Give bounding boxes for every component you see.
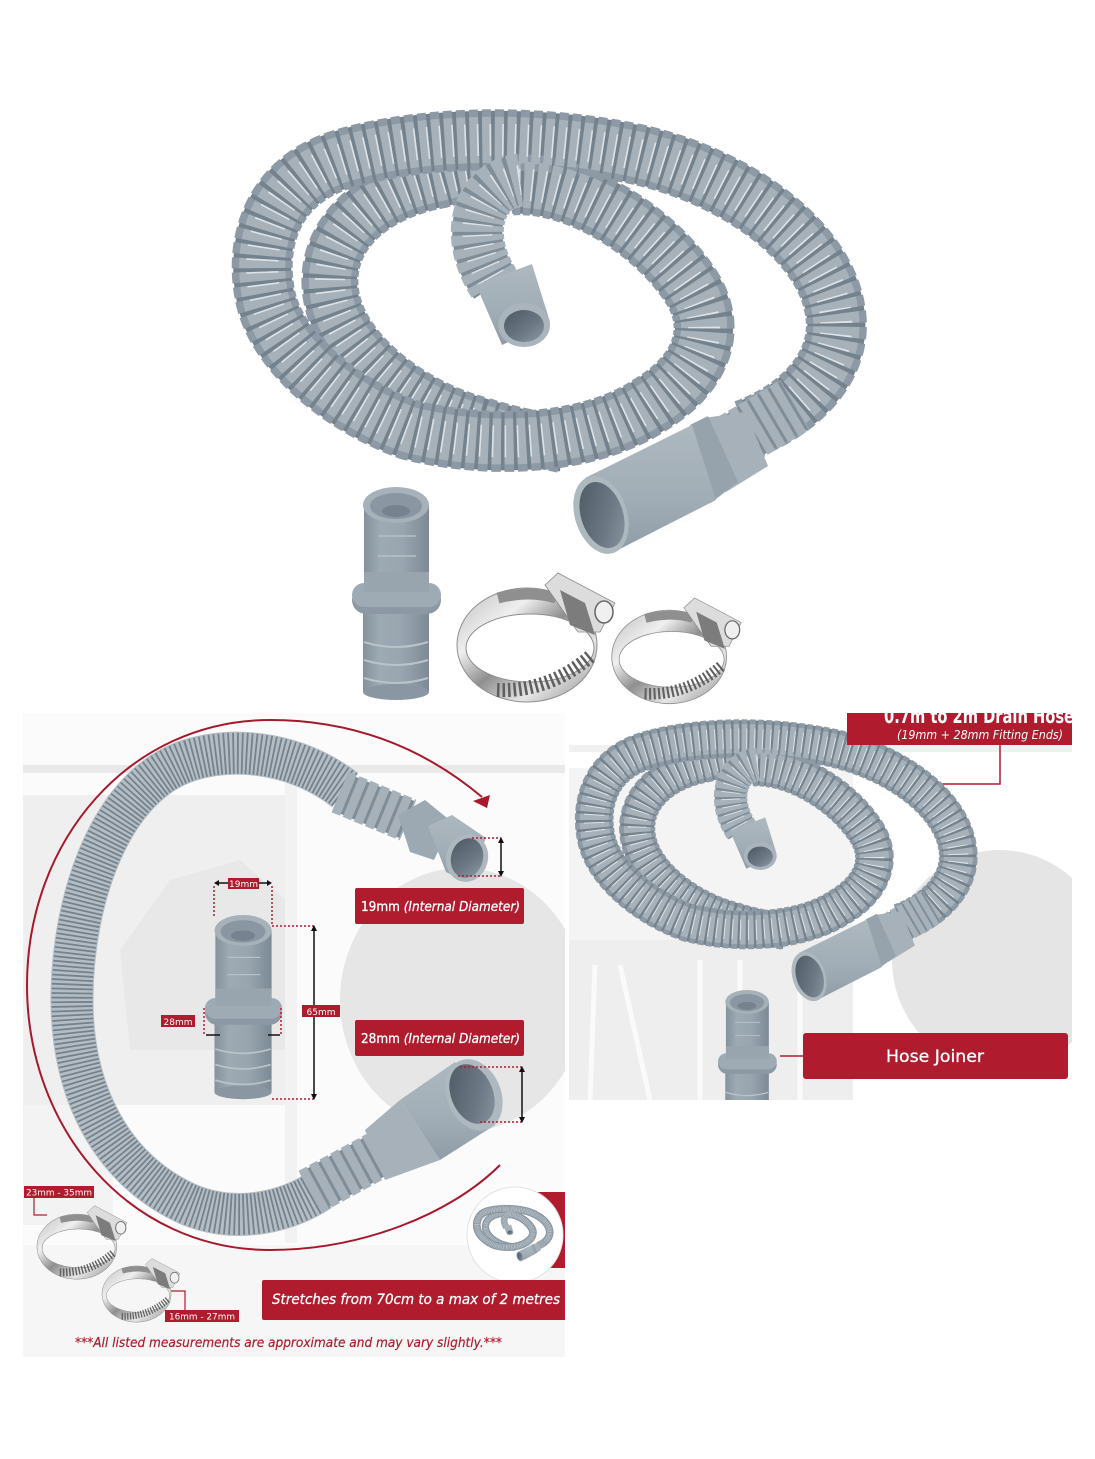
clamp: large with size tag	[24, 1186, 127, 1279]
red stretch arc with arrow	[27, 720, 500, 1250]
product photo: hose joiner	[352, 487, 441, 700]
tag: 28mm width: 28mm	[164, 1018, 192, 1028]
label: hose joiner: Hose Joiner	[886, 1047, 984, 1067]
thumbnail: full hose in circle	[467, 1187, 565, 1283]
label: 28mm internal diameter	[355, 1020, 524, 1056]
dimension: 19mm opening	[458, 837, 504, 877]
hose end: 19mm	[398, 800, 488, 882]
product photo: large hose clamp	[457, 573, 615, 702]
label: 28mm internal diameter: 28mm (Internal Diameter)	[361, 1032, 520, 1047]
label: hose joiner	[780, 1033, 1068, 1079]
product photo: small hose clamp	[612, 598, 741, 704]
title banner connector	[942, 745, 1001, 785]
label: 19mm internal diameter: 19mm (Internal Diameter)	[361, 900, 520, 915]
stretched hose	[72, 753, 408, 1214]
tag: 65mm length: 65mm	[306, 1008, 336, 1018]
hose in contents panel	[594, 739, 958, 1006]
tag: 28mm width	[161, 1015, 195, 1028]
product photo: coiled drain hose	[262, 140, 836, 561]
panel: contents	[569, 713, 1072, 1100]
joiner in contents panel	[718, 990, 777, 1100]
footnote: ***All listed measurements are approximate and may vary slightly.***	[75, 1336, 502, 1351]
banner: stretch range: Stretches from 70cm to a max of 2 metres	[272, 1292, 560, 1308]
dimension: 28mm opening	[460, 1066, 525, 1123]
panel: measurements	[23, 713, 599, 1357]
tag: 19mm width: 19mm	[229, 880, 258, 890]
title banner: (19mm + 28mm Fitting Ends)	[897, 728, 1063, 742]
joiner with dimensions	[204, 880, 317, 1100]
tag: 65mm length	[302, 1005, 340, 1018]
clamp: small with size tag: 16mm - 27mm	[169, 1312, 235, 1322]
banner: stretch range	[262, 1280, 572, 1320]
clamp: large with size tag: 23mm - 35mm	[26, 1188, 92, 1198]
label: 19mm internal diameter	[355, 888, 524, 924]
hose end: 28mm	[365, 1059, 503, 1180]
title banner	[847, 713, 1072, 745]
clamp: small with size tag	[102, 1258, 239, 1322]
